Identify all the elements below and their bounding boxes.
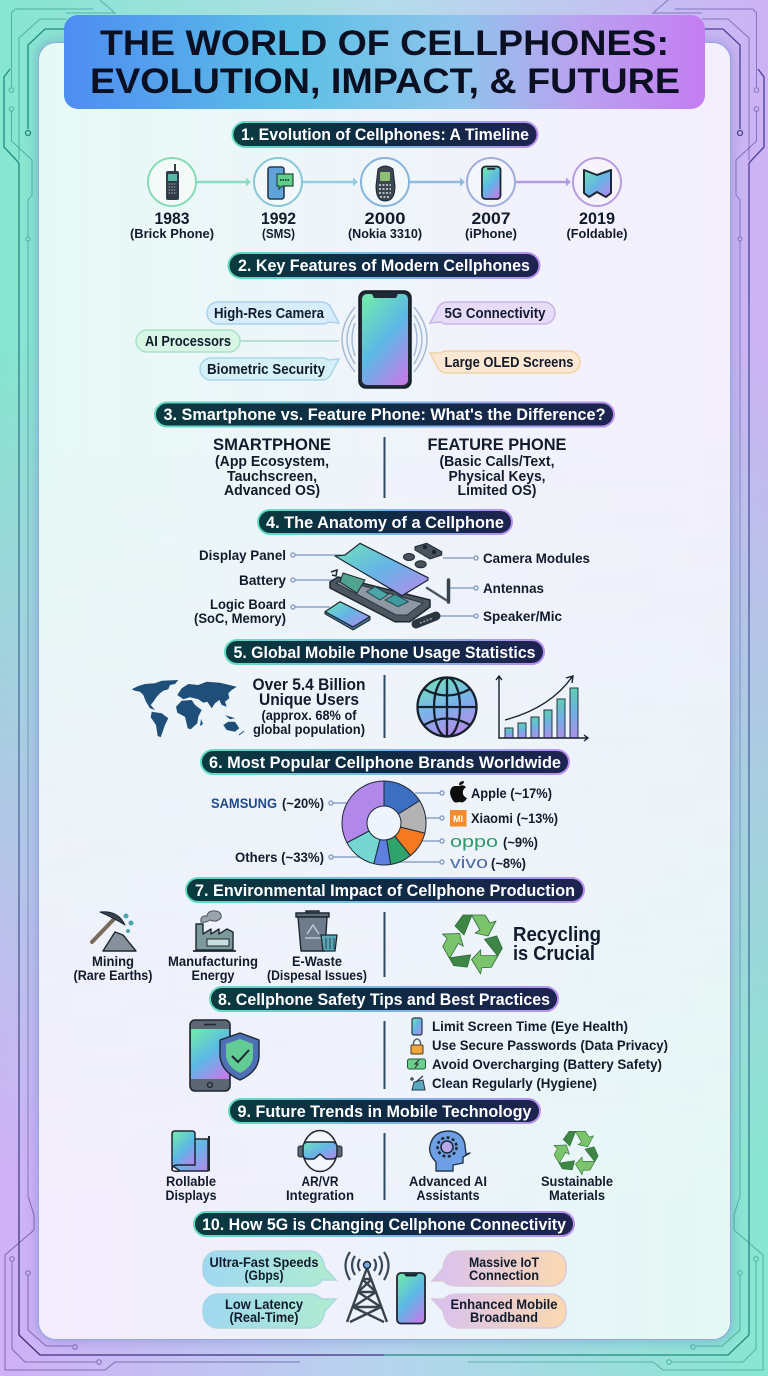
tip: avoid overcharging: Avoid Overcharging (Battery Safety) [432,1056,662,1072]
labels: E-Waste [292,954,342,969]
callout: Low Latency: (Real-Time) [230,1310,298,1325]
icon: sustainable materials [550,1131,601,1177]
node: 1983 brick phone [148,158,196,206]
callout: Low Latency [203,1294,336,1328]
right labels: Camera Modules [483,550,590,566]
panel: smartphone vs feature phone [213,435,566,499]
year labels: (Nokia 3310) [348,226,422,241]
icon: AI head [430,1131,470,1171]
donut chart [342,781,426,865]
heading: section 2: 2. Key Features of Modern Cellphones [238,256,530,275]
callout: Massive IoT [432,1251,566,1286]
year labels: 2019 [579,209,615,228]
heading: section 3: 3. Smartphone vs. Feature Phone: What's the Difference? [164,405,606,424]
labels: (Rare Earths) [74,968,152,983]
icon: phone [397,1273,425,1324]
callout: 5G Connectivity [430,302,555,324]
timeline [130,158,628,241]
callout: Enhanced Mobile: Broadband [470,1310,538,1325]
right labels [483,550,590,624]
panel: 5G connectivity [203,1251,566,1328]
stat text: Unique Users [259,691,359,709]
feature phone column: FEATURE PHONE [428,435,566,454]
panel: future trends [166,1130,613,1203]
speaker [416,616,436,624]
feature phone column: Limited OS) [458,483,537,499]
panel: anatomy of a cellphone [194,543,590,630]
title banner [64,15,705,109]
callout: Massive IoT: Massive IoT [469,1255,540,1270]
recycling text: is Crucial [513,943,595,965]
label: vivo: vivo [450,853,488,872]
heading: section 8: 8. Cellphone Safety Tips and Best Practices [218,990,550,1009]
heading: section 1: 1. Evolution of Cellphones: A Timeline [241,125,529,144]
labels: Displays [166,1188,216,1203]
smartphone column: SMARTPHONE [213,435,331,454]
stat text [252,676,366,737]
labels: Energy [192,968,235,983]
callout: Biometric Security [200,358,339,380]
node: 2019 foldable [573,158,621,206]
label: Xiaomi: Xiaomi (~13%) [471,810,558,826]
labels: Sustainable [541,1174,613,1189]
callout: Large OLED Screens [430,351,580,373]
leader lines [329,791,444,864]
year labels [130,209,628,241]
callout: Ultra-Fast Speeds: Ultra-Fast Speeds [210,1255,318,1270]
list: safety tips [408,1018,668,1091]
callout: Ultra-Fast Speeds [203,1251,336,1286]
stat text: (approx. 68% of [262,707,357,723]
label: OPPO: oppo [450,832,498,851]
heading: section 5: 5. Global Mobile Phone Usage Statistics [234,643,536,662]
smartphone column: (App Ecosystem, [215,454,329,470]
exploded phone illustration [325,543,448,630]
display panel [335,543,428,596]
feature phone column [428,435,566,499]
left labels: Logic Board [210,596,286,612]
stat text: Over 5.4 Billion [252,676,366,694]
panel: key features [136,291,580,388]
labels: Assistants [416,1188,480,1203]
node: 1992 SMS phone [254,158,302,206]
icon: world map [132,680,244,737]
heading: section 9: 9. Future Trends in Mobile Technology [238,1102,532,1121]
callout: Enhanced Mobile [432,1294,566,1328]
smartphone column: Advanced OS) [224,483,320,499]
callout: Massive IoT: Connection [469,1268,539,1283]
year labels: (Brick Phone) [130,226,214,241]
feature phone column: (Basic Calls/Text, [440,454,554,470]
callout: Large OLED Screens: Large OLED Screens [444,355,574,371]
icon: factory [193,911,236,951]
callout: High-Res Camera: High-Res Camera [214,306,325,322]
node: 2000 Nokia 3310 [361,158,409,206]
year labels: 1992 [261,209,296,228]
year labels: (SMS) [262,226,295,241]
tip: clean regularly: Clean Regularly (Hygiene) [432,1075,597,1091]
labels: Advanced AI [409,1174,487,1189]
tip: secure passwords: Use Secure Passwords (Data Privacy) [432,1037,668,1053]
year labels: 1983 [154,209,190,228]
recycling text [513,924,601,965]
phone illustration [359,291,411,388]
labels: Materials [549,1188,605,1203]
heading: section 4: 4. The Anatomy of a Cellphone [266,513,504,532]
stat text: global population) [253,721,365,737]
callout: Enhanced Mobile: Enhanced Mobile [450,1297,558,1312]
labels: (Dispesal Issues) [267,968,367,983]
labels: AR/VR [302,1174,339,1189]
label: Samsung: SAMSUNG [211,796,277,811]
labels [74,954,367,983]
right labels: Antennas [483,580,544,596]
heading: section 7: 7. Environmental Impact of Cellphone Production [195,881,575,900]
right labels: Speaker/Mic [483,608,562,624]
label: Apple: Apple (~17%) [471,785,552,801]
title line 1: THE WORLD OF CELLPHONES: [100,24,669,63]
icon: mining [92,912,136,951]
feature phone column: Physical Keys, [448,469,546,485]
callout: Biometric Security: Biometric Security [207,362,325,378]
left labels: Display Panel [199,547,286,563]
callout: Low Latency: Low Latency [225,1297,303,1312]
callout: AI Processors [136,330,240,352]
chassis [330,577,430,622]
smartphone column [213,435,331,499]
label: vivo: (~8%) [491,855,526,871]
icon: e-waste bin [296,911,337,951]
leader lines [291,553,478,618]
callout: 5G Connectivity: 5G Connectivity [444,306,546,322]
labels: Mining [92,954,134,969]
recycling text: Recycling [513,924,601,946]
panel: safety tips [190,1018,668,1091]
label: Samsung: (~20%) [282,795,324,811]
label: OPPO [450,832,538,851]
title line 2: EVOLUTION, IMPACT, & FUTURE [90,62,680,101]
icon: globe [418,678,476,736]
node: 2007 iPhone [467,158,515,206]
panel: environmental impact [74,911,601,983]
left labels: (SoC, Memory) [194,610,286,626]
left labels [194,547,286,626]
connector line [240,340,339,342]
label: OPPO: (~9%) [503,834,538,850]
callout: AI Processors: AI Processors [145,334,231,350]
year labels: 2007 [472,209,510,228]
smartphone column: Tauchscreen, [227,469,317,485]
icon: cell tower [346,1252,388,1322]
heading: section 6: 6. Most Popular Cellphone Brands Worldwide [209,753,561,772]
arrows between timeline nodes [197,178,571,186]
panel: global usage statistics [132,675,588,741]
icon: rollable display [172,1131,209,1171]
label: Others: Others (~33%) [235,849,324,865]
camera modules [415,543,442,559]
year labels: (Foldable) [566,226,628,241]
year labels: 2000 [364,209,406,228]
callout: High-Res Camera [207,302,339,324]
callout: Ultra-Fast Speeds: (Gbps) [244,1268,284,1283]
left labels: Battery [239,572,286,588]
label: vivo [450,853,526,872]
icon: phone with shield [190,1020,259,1091]
labels: Rollable [166,1174,216,1189]
tip: limit screen time: Limit Screen Time (Eye Health) [432,1018,628,1034]
icon: AR/VR headset [298,1130,342,1172]
year labels: (iPhone) [465,226,517,241]
labels: Manufacturing [168,954,258,969]
panel: brand market share [211,781,558,872]
label: Xiaomi: MI [453,814,463,824]
label: Apple [450,781,552,802]
antennas [447,580,450,602]
signal arcs [342,307,427,372]
heading: section 10: 10. How 5G is Changing Cellphone Connectivity [202,1215,567,1234]
labels [166,1174,613,1203]
bar chart [496,676,588,741]
icon: recycling [437,915,506,977]
labels: Integration [286,1188,354,1203]
label: Samsung [211,795,324,811]
battery [325,602,370,627]
